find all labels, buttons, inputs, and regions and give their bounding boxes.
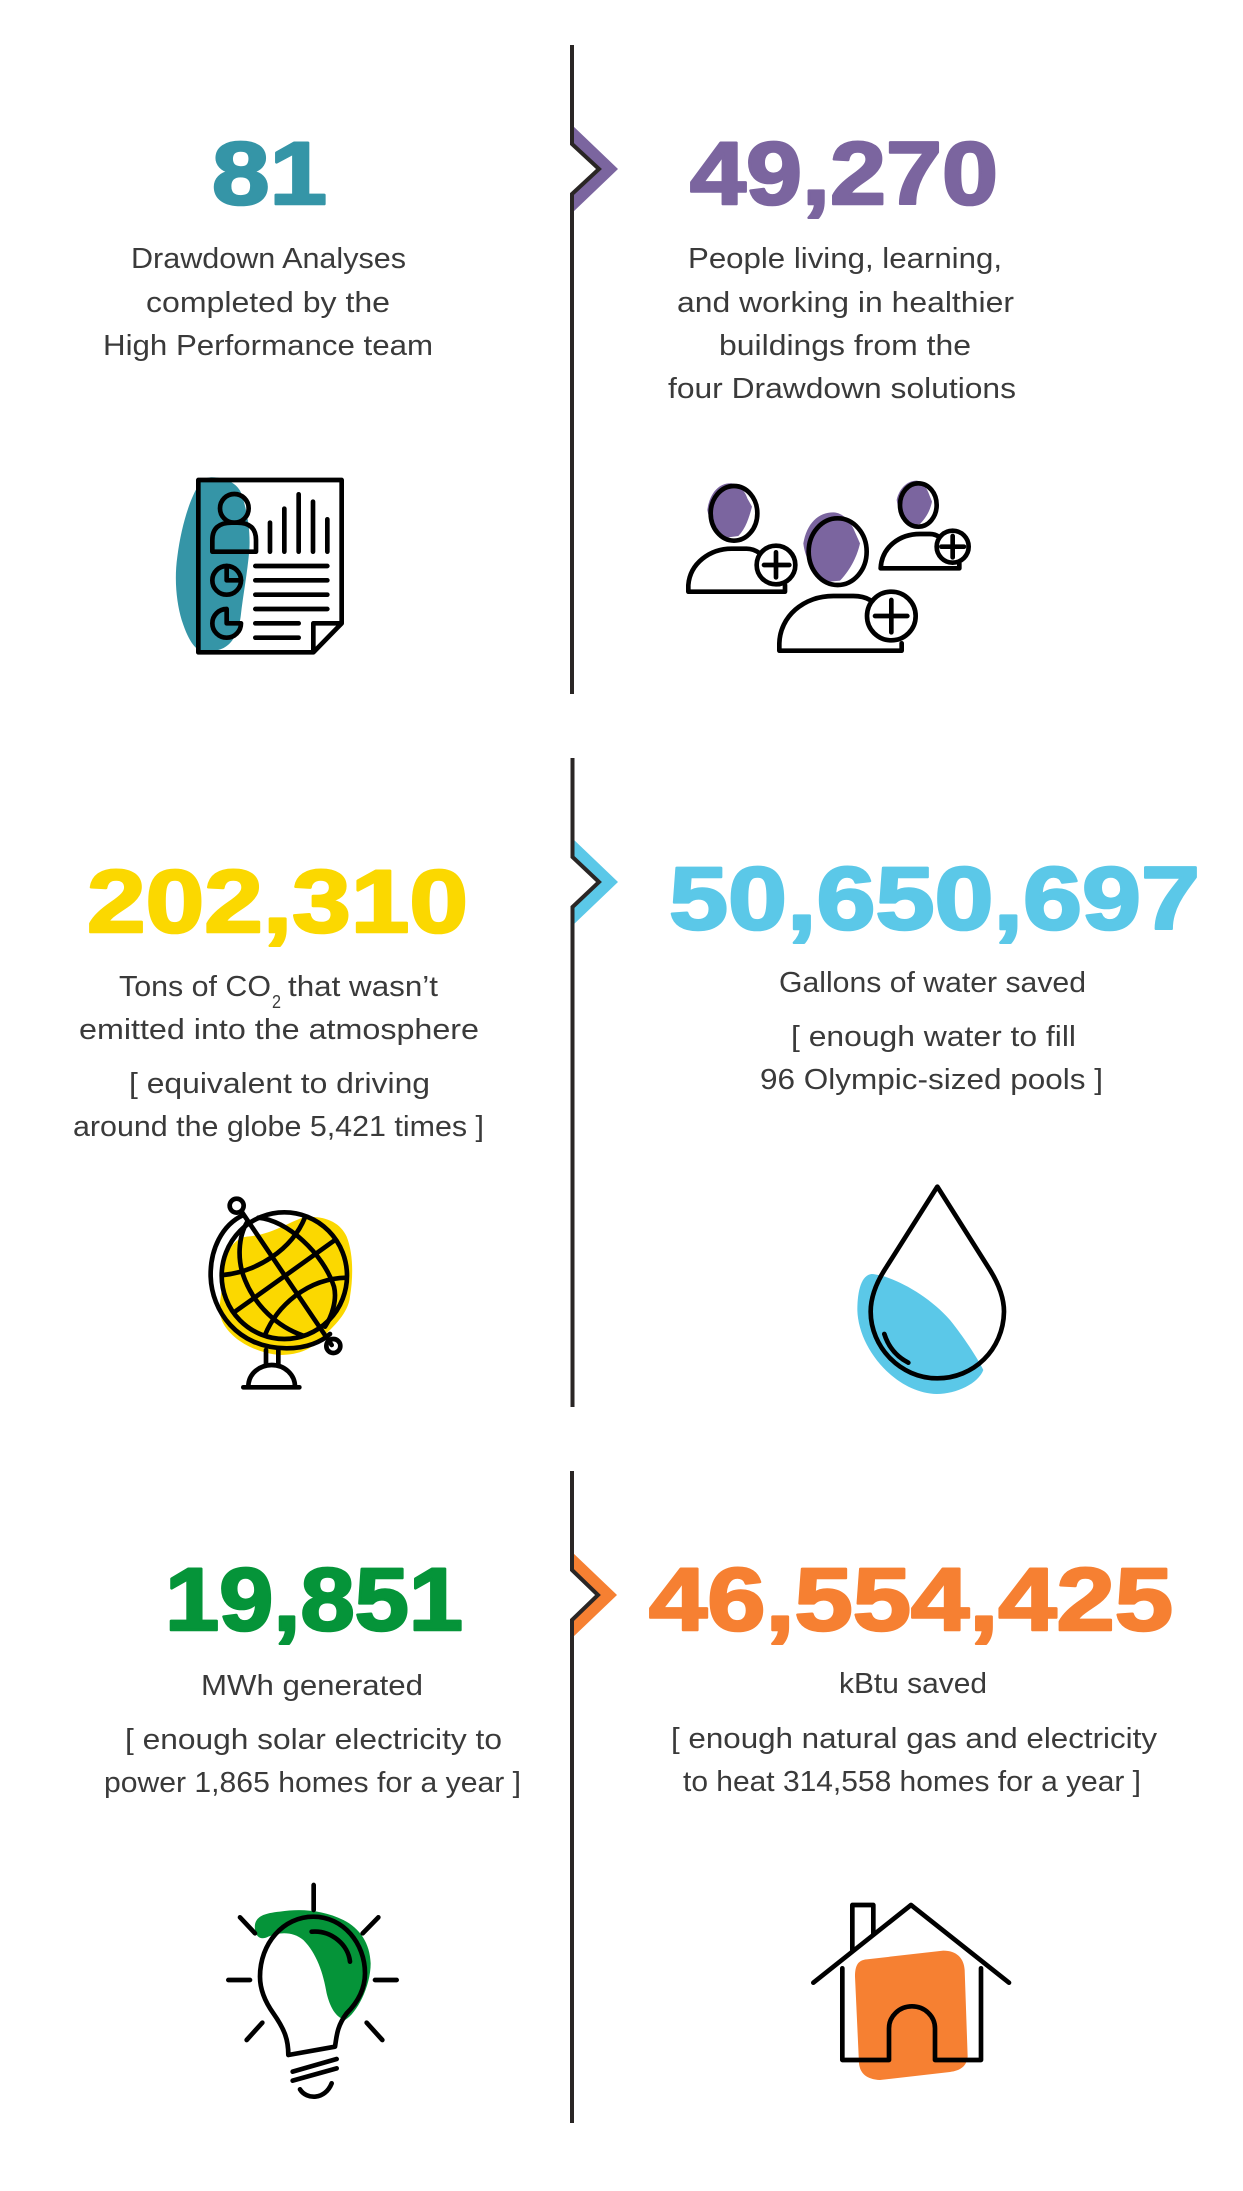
divider with orange chevron xyxy=(572,1471,617,2123)
description: completed by the xyxy=(146,287,390,319)
description xyxy=(73,971,484,1143)
description: power 1,865 homes for a year ] xyxy=(104,1767,521,1799)
icon: light bulb xyxy=(228,1885,397,2097)
description: High Performance team xyxy=(103,330,433,362)
description: [ equivalent to driving xyxy=(129,1068,430,1100)
description: that wasn’t xyxy=(288,971,438,1003)
stat: 81: 81 xyxy=(212,123,327,223)
description: 96 Olympic-sized pools ] xyxy=(760,1064,1103,1096)
panel: drawdown analyses xyxy=(103,123,433,652)
description: kBtu saved xyxy=(839,1668,987,1700)
description: buildings from the xyxy=(719,330,971,362)
description: [ enough solar electricity to xyxy=(125,1724,502,1756)
stat: 202,310: 202,310 xyxy=(87,851,468,951)
divider with blue chevron xyxy=(572,758,618,1407)
description: Drawdown Analyses xyxy=(131,243,406,275)
icon: water drop xyxy=(857,1187,1004,1394)
divider with purple chevron xyxy=(572,45,618,694)
description xyxy=(760,967,1103,1096)
description: four Drawdown solutions xyxy=(668,373,1016,405)
panel: kBtu saved xyxy=(649,1549,1173,2080)
description: [ enough natural gas and electricity xyxy=(671,1723,1158,1755)
stat: 46,554,425: 46,554,425 xyxy=(649,1549,1173,1649)
stat: 19,851: 19,851 xyxy=(165,1549,463,1649)
description xyxy=(671,1668,1158,1798)
stat: 50,650,697: 50,650,697 xyxy=(669,848,1200,948)
description xyxy=(103,243,433,362)
description: [ enough water to fill xyxy=(791,1021,1076,1053)
description: around the globe 5,421 times ] xyxy=(73,1111,484,1143)
icon: three people with plus signs xyxy=(688,481,969,651)
description: Gallons of water saved xyxy=(779,967,1086,999)
description: to heat 314,558 homes for a year ] xyxy=(683,1766,1141,1798)
icon: report document xyxy=(176,477,342,652)
stat: 49,270: 49,270 xyxy=(690,123,998,223)
panel: healthier buildings xyxy=(668,123,1016,651)
description: emitted into the atmosphere xyxy=(79,1014,479,1046)
icon: house xyxy=(813,1905,1009,2080)
panel: tons of CO2 xyxy=(73,851,484,1387)
description: 2 xyxy=(272,992,281,1012)
description: Tons of CO xyxy=(119,971,271,1003)
icon: globe xyxy=(211,1199,352,1387)
description: People living, learning, xyxy=(688,243,1002,275)
panel: MWh generated xyxy=(104,1549,521,2097)
description xyxy=(668,243,1016,405)
description: and working in healthier xyxy=(677,287,1014,319)
description: MWh generated xyxy=(201,1670,423,1702)
panel: gallons of water xyxy=(669,848,1200,1394)
description xyxy=(104,1670,521,1799)
